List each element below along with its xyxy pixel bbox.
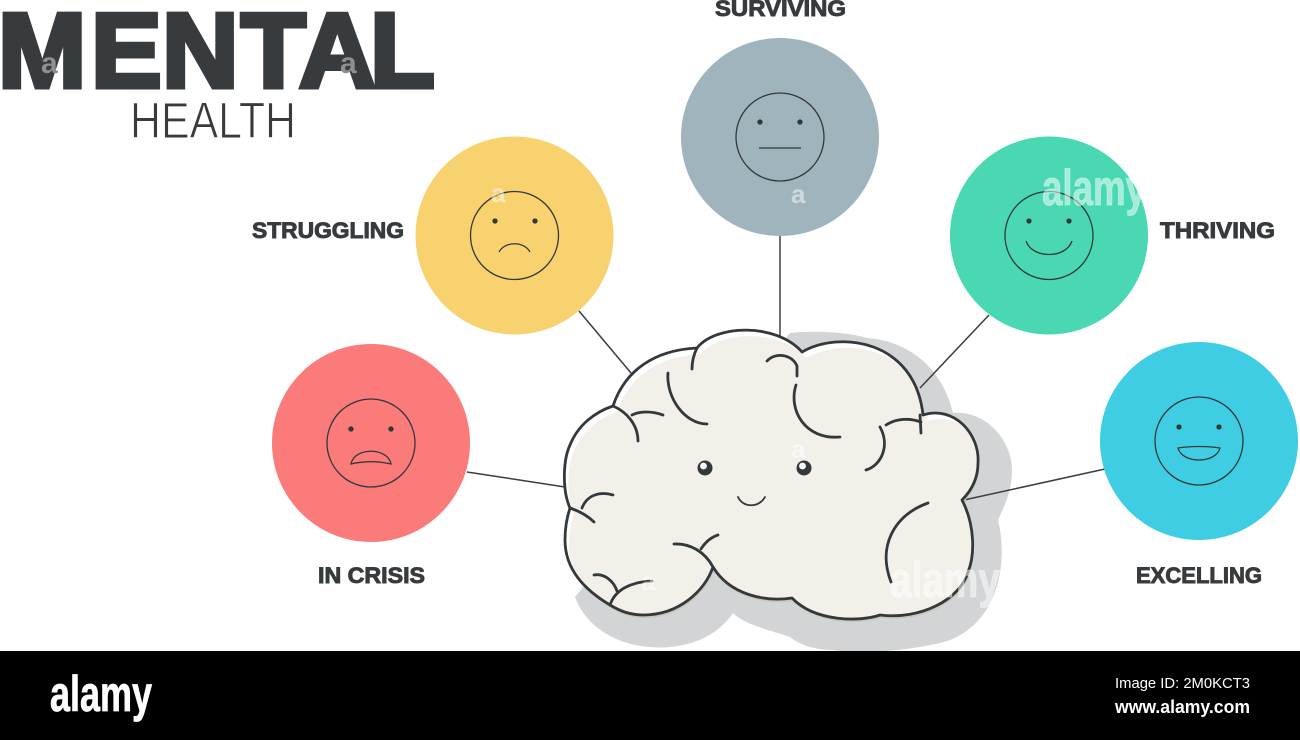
watermarks: a (791, 179, 806, 209)
panel: thriving (950, 136, 1148, 334)
brain illustration (564, 330, 982, 625)
labels (252, 0, 1275, 588)
brain folds (570, 348, 928, 605)
panel: excelling (1100, 342, 1298, 540)
footer image id: Image ID: 2M0KCT3 (1115, 675, 1250, 692)
icon: grinning face (1155, 397, 1243, 485)
brain face (698, 460, 812, 505)
watermarks (491, 160, 1146, 608)
title: MENTAL HEALTH: HEALTH (130, 92, 296, 149)
brain body (564, 330, 982, 625)
labels: EXCELLING (1136, 563, 1262, 588)
watermarks: alamy (890, 552, 1000, 608)
title: MENTAL HEALTH: a (340, 47, 357, 80)
watermarks: alamy (1042, 160, 1146, 216)
title: MENTAL HEALTH: a (41, 47, 58, 80)
panel: in crisis (272, 344, 470, 542)
footer bar (0, 651, 1300, 740)
watermarks: a (791, 434, 806, 464)
labels: THRIVING (1160, 218, 1275, 243)
icon: neutral face (736, 93, 824, 181)
labels: STRUGGLING (252, 218, 404, 243)
icon: smiling face (1005, 192, 1093, 280)
panel: surviving (681, 38, 879, 236)
icon: distressed face (327, 399, 415, 487)
watermarks: a (641, 566, 656, 596)
connector lines (467, 235, 1105, 500)
watermarks: a (491, 178, 506, 208)
icon: sad face (470, 192, 558, 280)
labels: IN CRISIS (318, 563, 425, 588)
footer website: www.alamy.com (1114, 697, 1250, 717)
brain shadow (575, 332, 1012, 652)
footer logo: alamy: alamy (50, 666, 152, 722)
panel: struggling (416, 136, 614, 334)
